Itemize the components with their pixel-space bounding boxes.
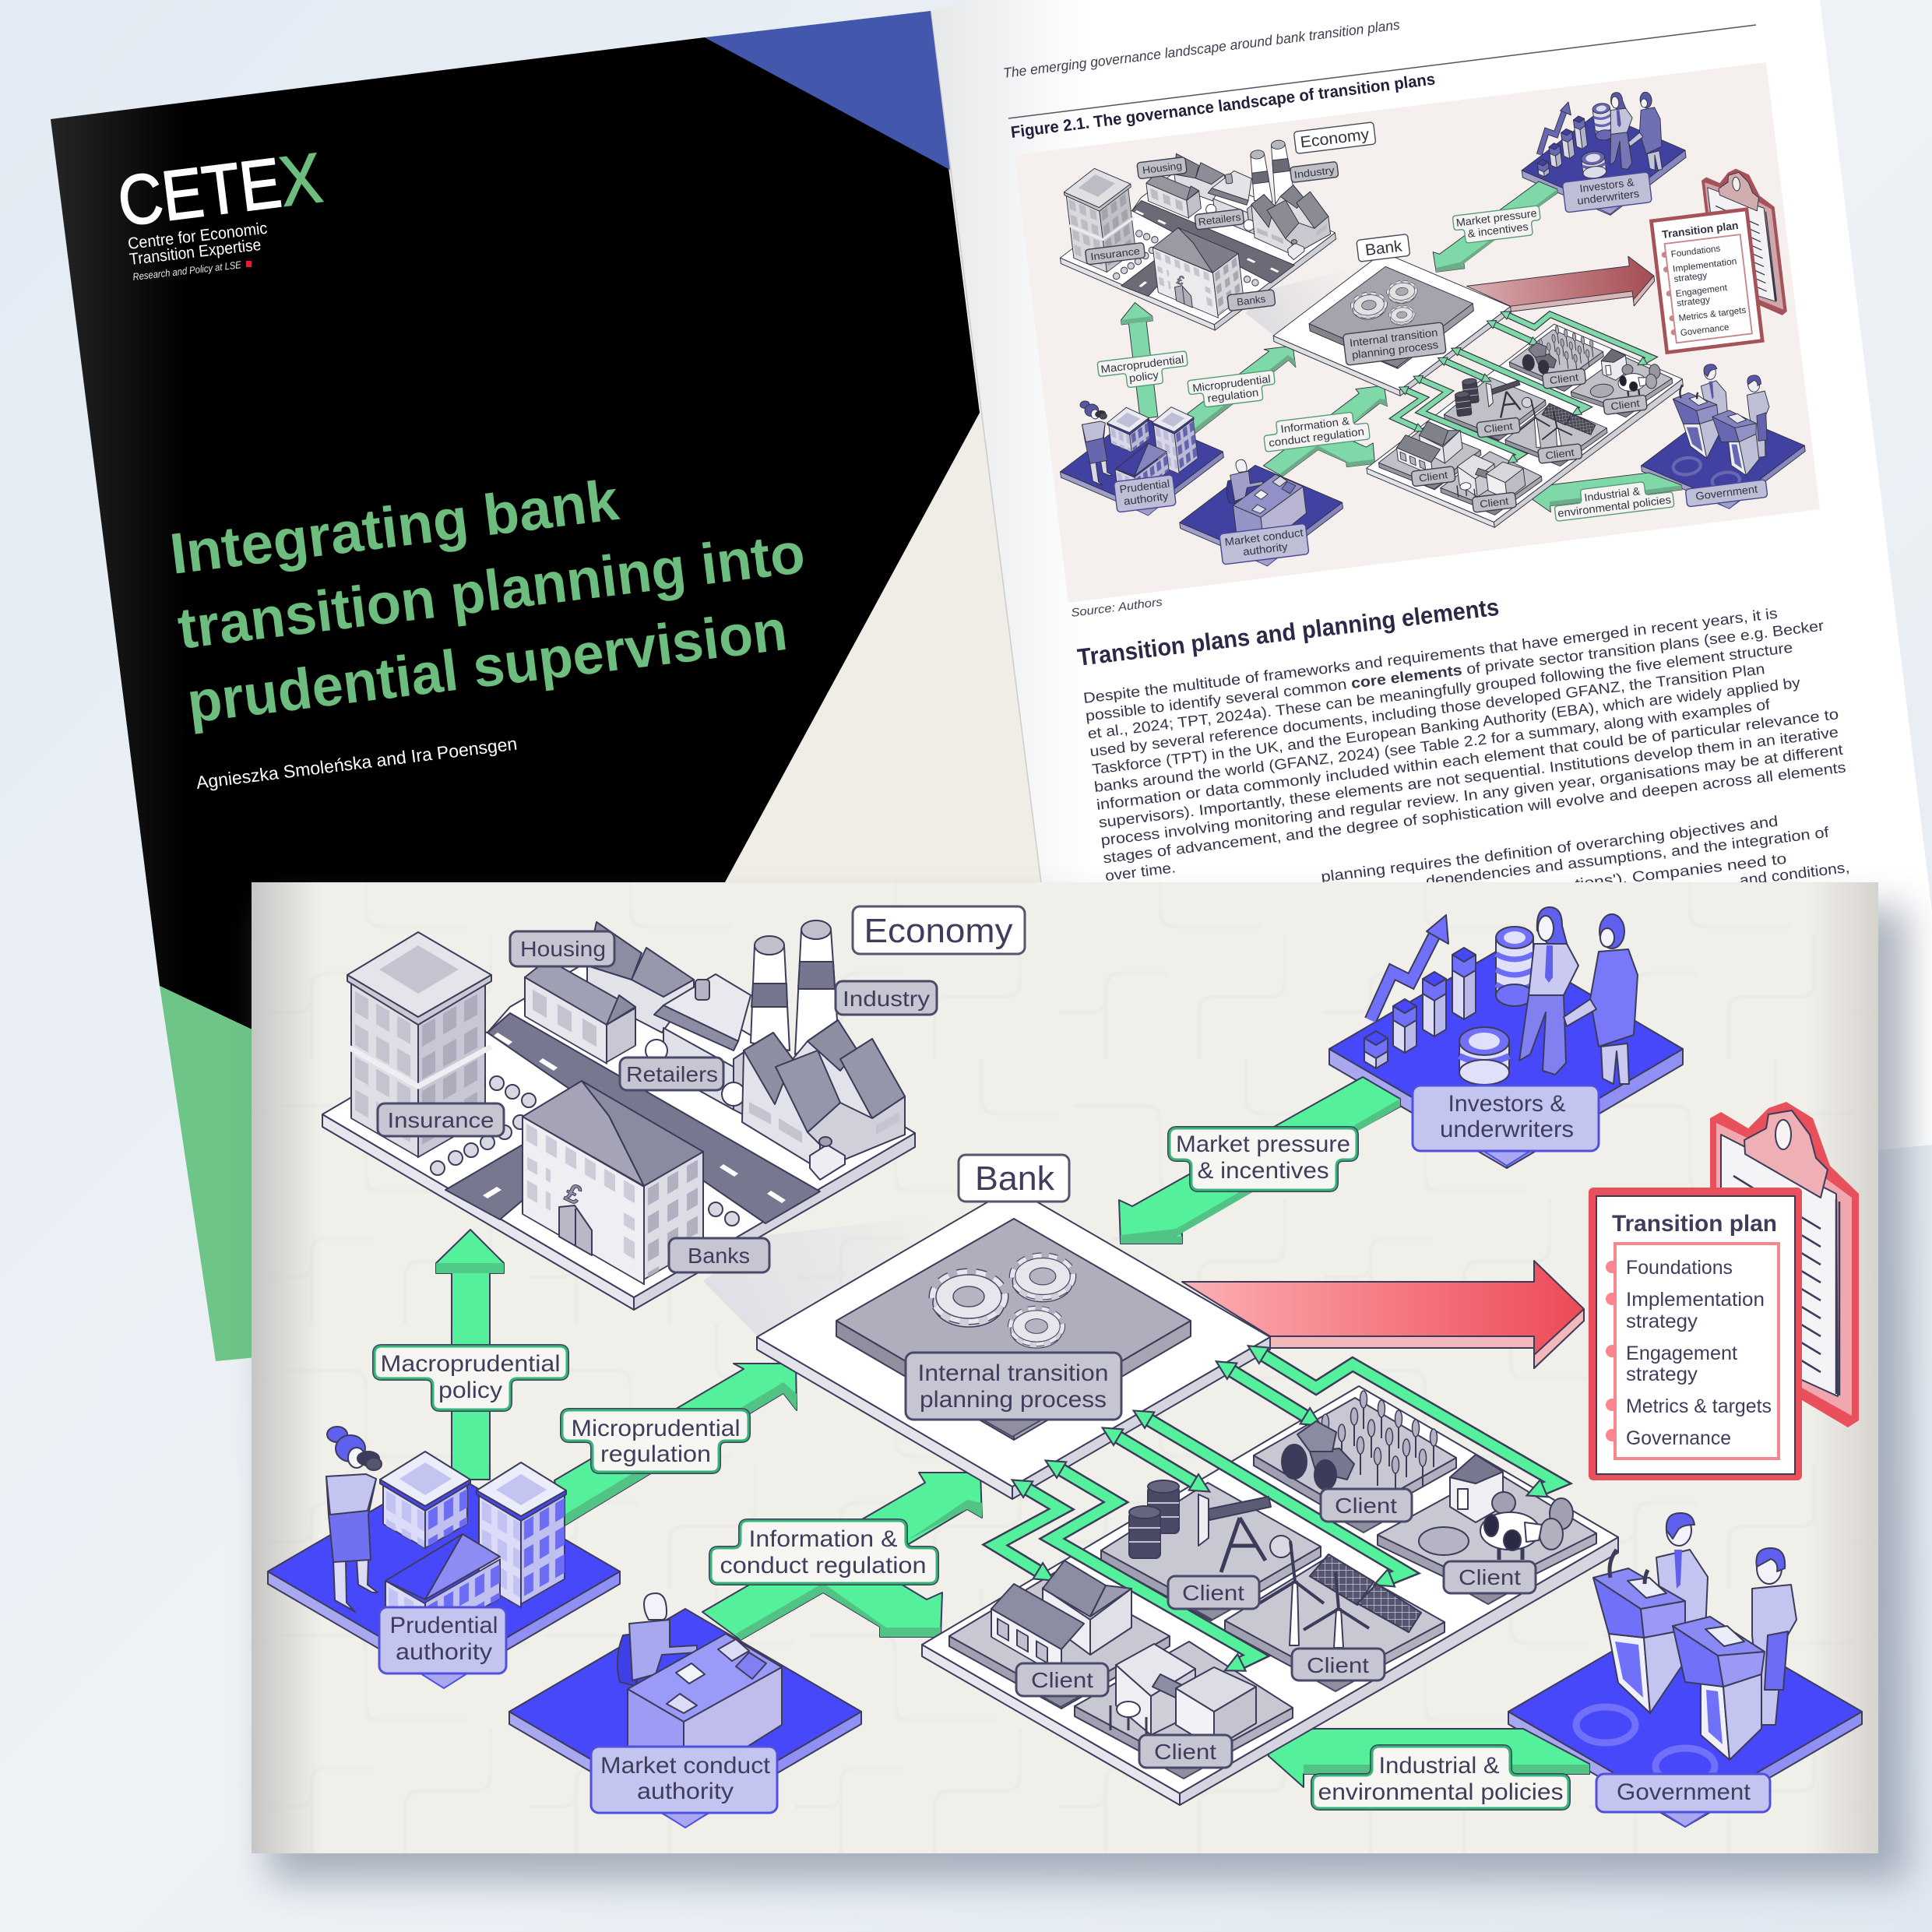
small copy of the governance figure on the report page: Prudential	[1119, 477, 1170, 495]
label: Prudential authority: Prudential	[389, 1613, 498, 1638]
small copy of the governance figure on the report page: Client	[1545, 446, 1575, 462]
label: Information and conduct regulation: Information &	[749, 1526, 897, 1552]
small copy of the governance figure on the report page: Insurance	[1090, 245, 1141, 262]
main panel drop shadow	[269, 907, 1908, 1881]
body text: planning requires the definition of overarching objectives and	[1320, 814, 1779, 885]
small copy of the governance figure on the report page: Economy	[1299, 125, 1371, 152]
list of plan elements: strategy	[1626, 1364, 1698, 1385]
figure title: Figure 2.1. The governance landscape of transition plans	[1010, 70, 1436, 142]
prudential art: central bank buildings	[380, 1452, 566, 1642]
body text	[1082, 600, 1859, 966]
cover authors: Agnieszka Smoleńska and Ira Poensgen	[195, 734, 519, 793]
label: Client (housing): Client	[1031, 1668, 1093, 1692]
small copy of the governance figure on the report page: underwriters	[1577, 187, 1640, 207]
label: Client (oil)	[1168, 1576, 1259, 1620]
label: Prudential authority: authority	[396, 1639, 492, 1665]
cover green corner	[160, 986, 265, 1361]
body text: over time.	[1104, 860, 1177, 885]
label: Retailers	[620, 1057, 723, 1090]
investors platform	[1329, 945, 1683, 1168]
body text: process involving monitoring and regular review. In any given year, organisations may be at different	[1100, 742, 1845, 850]
label: Government	[1596, 1774, 1770, 1827]
small copy of the governance figure on the report page: & incentives	[1467, 220, 1529, 240]
label: Microprudential regulation	[562, 1410, 748, 1472]
first podium	[1609, 1634, 1650, 1713]
shadow band between economy and bank	[703, 1209, 984, 1337]
roads	[445, 1013, 820, 1223]
label: Market pressure and incentives: & incentives	[1198, 1158, 1328, 1184]
bullet markers	[1606, 1261, 1618, 1441]
small copy of the governance figure on the report page: Industry	[1293, 164, 1336, 181]
government platform	[1508, 1609, 1862, 1827]
list of plan elements: Governance	[1626, 1427, 1731, 1449]
small copy of the governance figure on the report page: Governance	[1680, 322, 1730, 338]
body text: Taskforce (TPT) in the UK, and the European Banking Authority (EBA), which are widely applied by	[1091, 675, 1802, 778]
label: Economy	[853, 906, 1025, 954]
body text: tions'). Companies need to	[1575, 851, 1787, 893]
body text: dependencies and assumptions, and the integration of	[1425, 825, 1830, 890]
right report page	[931, 0, 1932, 1160]
label: Market pressure and incentives	[1170, 1128, 1357, 1190]
label: Economy: Economy	[864, 912, 1012, 950]
arrow: information and conduct regulation	[702, 1473, 982, 1640]
label: Client (oil): Client	[1182, 1581, 1244, 1605]
small copy of the governance figure on the report page: environmental policies	[1557, 493, 1672, 519]
small copy of the governance figure on the report page: Client	[1479, 495, 1509, 510]
small copy of the governance figure on the report page: Industrial &	[1583, 484, 1642, 504]
label: Client (agriculture)	[1321, 1489, 1412, 1533]
list of plan elements: Metrics & targets	[1626, 1395, 1772, 1417]
small copy of the governance figure on the report page: Retailers	[1198, 211, 1242, 228]
body text: et al., 2024; TPT, 2024a). These can be meaningfully grouped following the five element structure	[1087, 640, 1793, 743]
street trees	[431, 1076, 739, 1226]
small copy of the governance figure on the report page: planning process	[1351, 338, 1439, 361]
investors art: bars and growth arrow	[1364, 915, 1476, 1068]
client platform	[922, 1386, 1618, 1805]
small copy of the governance figure on the report page	[1015, 62, 1820, 603]
CETEX logo: Centre for Economic	[127, 220, 268, 253]
small copy of the governance figure on the report page: Engagement	[1675, 283, 1729, 299]
small copy of the governance figure on the report page: Bank	[1364, 237, 1404, 259]
small copy of the governance figure on the report page: Client	[1418, 469, 1448, 484]
cover title: prudential supervision	[184, 597, 790, 735]
investors art: people	[1519, 907, 1638, 1084]
market conduct art: person at desk	[618, 1593, 782, 1747]
label: Prudential authority	[379, 1607, 506, 1688]
label: Housing: Housing	[520, 937, 606, 961]
small copy of the governance figure on the report page: policy	[1128, 368, 1160, 384]
client art: houses	[991, 1561, 1131, 1677]
label: Housing	[510, 931, 614, 966]
label: Government: Government	[1617, 1779, 1751, 1805]
small copy of the governance figure on the report page: Client	[1549, 371, 1579, 386]
body text: and conditions,	[1739, 860, 1850, 889]
label: Industry: Industry	[843, 987, 930, 1011]
label: Internal transition planning process: Internal transition	[917, 1360, 1109, 1386]
body text: supervisors). Importantly, these elements are not sequential. Institutions develop them in an iterative	[1098, 724, 1839, 832]
label: Insurance: Insurance	[388, 1108, 494, 1132]
label: Investors and underwriters: underwriters	[1440, 1117, 1574, 1142]
section heading: Transition plans and planning elements	[1076, 593, 1501, 671]
main governance panel	[252, 882, 1878, 1853]
air conditioning unit	[810, 1145, 845, 1180]
industry chimneys	[751, 920, 838, 1054]
small copy of the governance figure on the report page: strategy	[1673, 270, 1708, 284]
label: Client (livestock)	[1444, 1561, 1536, 1604]
arrow: industrial and environmental policies	[1269, 1716, 1589, 1787]
small copy of the governance figure on the report page: Client	[1610, 397, 1641, 412]
body text: used by several reference documents, including those developed GFANZ, the Transition Plan	[1089, 661, 1766, 760]
label: Market pressure and incentives: Market pressure	[1176, 1131, 1350, 1157]
government art: speakers and podiums	[1593, 1513, 1797, 1760]
housing	[525, 922, 694, 1064]
factory	[742, 1020, 905, 1180]
economy bank building: £	[561, 1177, 586, 1211]
label: Internal transition planning process: planning process	[920, 1387, 1107, 1413]
report cover	[51, 11, 1041, 1361]
label: Investors and underwriters	[1413, 1086, 1599, 1166]
client plots	[949, 1398, 1596, 1776]
client art: livestock farm	[1419, 1455, 1573, 1560]
small copy of the governance figure on the report page: Metrics & targets	[1678, 305, 1747, 323]
small copy of the governance figure on the report page: Implementation	[1672, 256, 1737, 274]
label: Client (hospitality)	[1139, 1735, 1232, 1779]
client art: wheat and tractor	[1282, 1391, 1438, 1494]
investors art: coins	[1459, 927, 1533, 1085]
small copy of the governance figure on the report page: regulation	[1207, 385, 1259, 404]
small copy of the governance figure on the report page: Housing	[1142, 160, 1183, 176]
label: Investors and underwriters: Investors &	[1448, 1091, 1565, 1117]
prudential art: woman with binoculars	[326, 1427, 382, 1612]
label: Information and conduct regulation: conduct regulation	[720, 1553, 927, 1578]
client art: cafe	[1110, 1644, 1256, 1748]
label: Client (housing)	[1016, 1663, 1108, 1707]
body text: Despite the multitude of frameworks and requirements that have emerged in recent years, it is	[1082, 606, 1779, 707]
small copy of the governance figure on the report page: Macroprudential	[1100, 353, 1184, 375]
small copy of the governance figure on the report page: Market conduct	[1224, 526, 1304, 548]
body text: information or data commonly included within each element that could be of particular relevance to	[1096, 706, 1839, 814]
small copy of the governance figure on the report page: authority	[1123, 490, 1169, 508]
client art: oil	[1129, 1480, 1292, 1572]
small copy of the governance figure on the report page: Foundations	[1670, 244, 1721, 259]
arrow: macroprudential policy	[436, 1230, 504, 1480]
label: Industrial and environmental policies: environmental policies	[1318, 1779, 1564, 1805]
label: Bank: Bank	[975, 1160, 1055, 1198]
label: Client (agriculture): Client	[1335, 1494, 1397, 1518]
arrow: microprudential regulation	[554, 1364, 797, 1526]
label: Bank	[959, 1155, 1069, 1202]
second podium	[1701, 1682, 1730, 1760]
small copy of the governance figure on the report page: strategy	[1677, 294, 1711, 308]
body text: banks around the world (GFANZ, 2024) (see Table 2.2 for a summary, along with examples of	[1093, 697, 1772, 796]
CETEX logo	[114, 139, 326, 283]
label: Client (livestock): Client	[1459, 1565, 1521, 1589]
label: Macroprudential policy	[375, 1346, 567, 1409]
CETEX logo: Transition Expertise	[128, 236, 262, 269]
CETEX logo: Research and Policy at LSE	[132, 259, 242, 283]
CETEX logo: CETEX	[114, 139, 326, 241]
small copy of the governance figure on the report page: Microprudential	[1191, 372, 1272, 394]
running header: The emerging governance landscape around bank transition plans	[1002, 17, 1401, 81]
body text: stages of advancement, and the degree of sophistication will evolve and deepen across all elements	[1102, 759, 1847, 867]
figure source: Source: Authors	[1070, 596, 1163, 620]
transition plan heading: Transition plan	[1612, 1211, 1777, 1237]
label: Client (renewables)	[1292, 1649, 1385, 1691]
list of plan elements: Implementation	[1626, 1289, 1765, 1311]
label: Market conduct authority: authority	[637, 1779, 734, 1804]
label: Market conduct authority	[591, 1747, 777, 1828]
client art: solar and wind	[1259, 1541, 1421, 1648]
arrow: market pressure and incentives	[1119, 1077, 1400, 1244]
label: Macroprudential policy: Macroprudential	[380, 1351, 561, 1377]
small copy of the governance figure on the report page: Internal transition	[1349, 326, 1438, 349]
client connector arrows	[995, 1353, 1557, 1665]
label: Banks	[669, 1238, 769, 1272]
label: Insurance	[378, 1103, 504, 1136]
small copy of the governance figure on the report page: conduct regulation	[1268, 425, 1365, 449]
internal process plot	[836, 1321, 1014, 1440]
body text: possible to identify several common core elements of private sector transition plans (see e.g. Becker	[1085, 618, 1825, 725]
label: Information and conduct regulation	[711, 1521, 937, 1583]
diagram artwork	[268, 907, 1862, 1827]
economy bank building	[523, 1081, 703, 1284]
cover title: Integrating bank	[167, 467, 622, 586]
small copy of the governance figure on the report page: Investors &	[1579, 175, 1635, 195]
bank platform	[757, 1188, 1270, 1499]
label: Retailers: Retailers	[626, 1062, 718, 1086]
label: Macroprudential policy: policy	[438, 1378, 502, 1403]
label: Industrial and environmental policies: Industrial &	[1378, 1753, 1500, 1779]
prudential authority platform	[268, 1469, 620, 1687]
cover title	[167, 467, 808, 735]
list of plan elements: strategy	[1626, 1311, 1698, 1332]
list of plan elements: Engagement	[1626, 1343, 1737, 1364]
small copy of the governance figure on the report page: Banks	[1236, 293, 1267, 308]
small copy of the governance figure on the report page: Client	[1483, 420, 1514, 435]
label: Industry	[836, 981, 937, 1015]
list of plan elements: Foundations	[1626, 1257, 1733, 1279]
panel: transition plan	[1589, 1188, 1802, 1480]
label: Microprudential regulation: regulation	[600, 1441, 711, 1467]
label: Client (renewables): Client	[1307, 1653, 1369, 1677]
small copy of the governance figure on the report page: Transition plan	[1661, 219, 1739, 241]
insurance building	[347, 932, 491, 1157]
label: Banks: Banks	[688, 1244, 750, 1268]
economy platform	[322, 950, 915, 1310]
cover blue triangle	[705, 11, 950, 170]
cover black block	[51, 37, 980, 1032]
retailers building	[646, 974, 757, 1121]
label: Microprudential regulation: Microprudential	[572, 1416, 740, 1441]
red arrow to transition plan	[1182, 1261, 1584, 1368]
label: Industrial and environmental policies	[1313, 1747, 1568, 1808]
small copy of the governance figure on the report page: Government	[1694, 482, 1758, 502]
small copy of the governance figure on the report page: authority	[1242, 540, 1288, 558]
clipboard	[1710, 1102, 1859, 1427]
list of plan elements	[1615, 1244, 1779, 1459]
small copy of the governance figure on the report page: Information &	[1280, 414, 1350, 435]
label: Market conduct authority: Market conduct	[600, 1753, 771, 1779]
label: Internal transition planning process	[906, 1353, 1121, 1437]
cover title: transition planning into	[174, 520, 808, 661]
gears	[933, 1256, 1073, 1348]
label: Client (hospitality): Client	[1154, 1740, 1216, 1764]
small copy of the governance figure on the report page: Market pressure	[1455, 206, 1538, 229]
market conduct platform	[509, 1609, 861, 1827]
